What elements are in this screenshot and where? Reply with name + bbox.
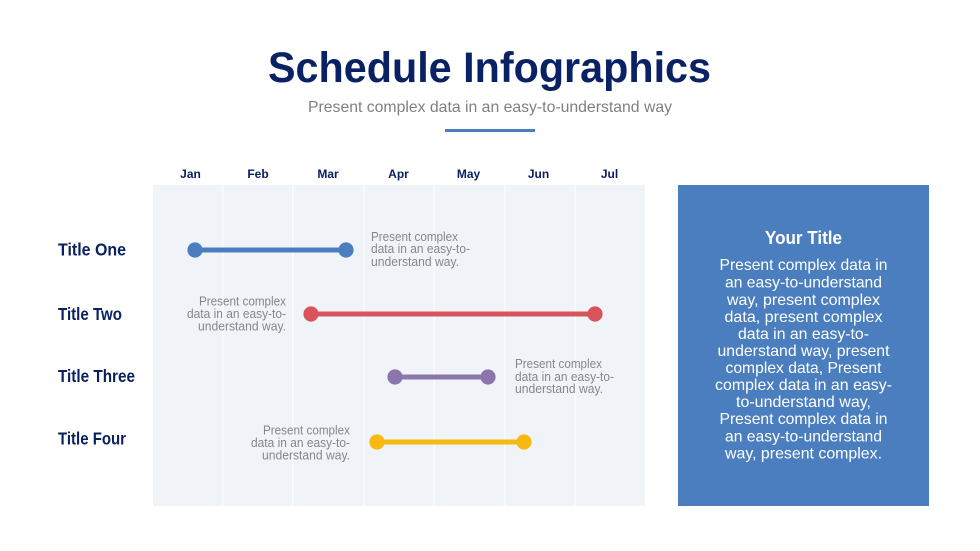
note: Title Four: Present complex [263, 424, 351, 438]
callout body text: data in an easy-to- [738, 326, 869, 343]
note: Title One [371, 230, 470, 269]
callout body text: Present complex data in [720, 257, 888, 274]
callout body text: to-understand way, [736, 394, 871, 411]
note: Title Three [515, 357, 614, 396]
month labels: Jul [601, 167, 618, 181]
note: Title One: understand way. [371, 255, 459, 269]
note: Title Two: understand way. [198, 320, 286, 334]
row title: Title Four: Title Four [58, 428, 126, 448]
callout body text: Present complex data in [720, 411, 888, 428]
note: Title One: Present complex [371, 230, 459, 244]
schedule bar: Title Four [369, 434, 532, 450]
callout body text: data, present complex [724, 309, 882, 326]
note: Title Four: understand way. [262, 448, 350, 462]
panel: timeline grid [153, 185, 645, 506]
title accent rule [445, 129, 535, 132]
note: Title Two [187, 294, 287, 334]
note: Title Three: Present complex [515, 357, 603, 371]
callout body text: complex data, Present [726, 360, 882, 377]
note: Title Three: data in an easy-to- [515, 370, 614, 384]
subtitle: Present complex data in an easy-to-understand way [308, 99, 672, 116]
month labels: Jan [180, 167, 201, 181]
schedule bar: Title One [187, 242, 354, 258]
callout body text: understand way, present [718, 343, 890, 360]
callout body text: an easy-to-understand [725, 428, 882, 446]
month labels: Jun [528, 167, 549, 181]
schedule bar: Title Two [303, 306, 603, 322]
title: Schedule Infographics [268, 44, 711, 92]
callout body text: an easy-to-understand [725, 274, 882, 292]
note: Title One: data in an easy-to- [371, 242, 470, 256]
note: Title Three: understand way. [515, 382, 603, 396]
note: Title Two: data in an easy-to- [187, 307, 286, 321]
note: Title Four [251, 424, 351, 462]
note: Title Four: data in an easy-to- [251, 436, 350, 450]
schedule bar: Title Three [387, 369, 496, 385]
panel: your title callout [678, 185, 929, 506]
month labels [180, 167, 618, 181]
month labels: May [457, 167, 480, 181]
row title: Title One: Title One [58, 240, 126, 260]
callout body text: way, present complex. [724, 446, 882, 462]
row title: Title Three: Title Three [58, 366, 135, 386]
note: Title Two: Present complex [199, 294, 287, 308]
callout body text [715, 257, 892, 462]
callout body text: complex data in an easy- [715, 377, 892, 394]
month labels: Apr [388, 167, 409, 181]
row title: Title Two: Title Two [58, 304, 122, 324]
callout body text: way, present complex [726, 292, 880, 309]
month labels: Feb [247, 167, 269, 181]
month labels: Mar [317, 167, 339, 181]
callout heading: Your Title [765, 228, 842, 248]
